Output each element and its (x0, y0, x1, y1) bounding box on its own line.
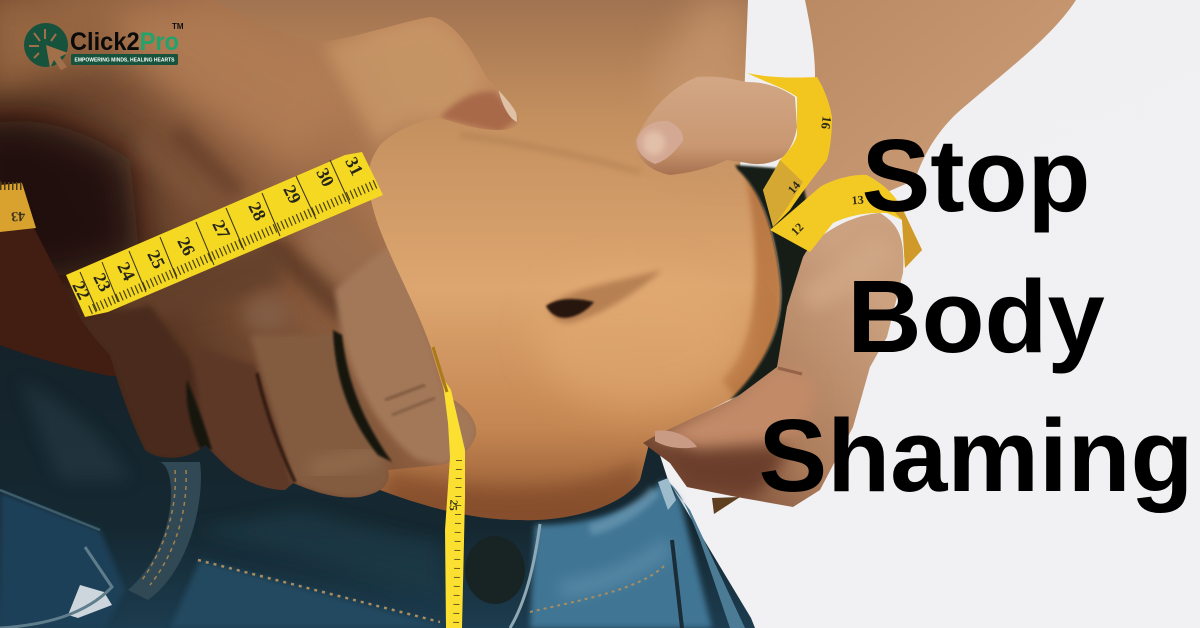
logo trademark: TM (172, 22, 184, 31)
gaps between fingers (333, 330, 392, 462)
index finger (335, 240, 476, 465)
torso and belly (215, 0, 781, 520)
tape: left wrist: 22 (68, 278, 94, 303)
ring finger (193, 358, 280, 490)
pinky finger (116, 304, 198, 404)
tape: left wrist: 23 (89, 270, 115, 295)
tape: left wrist: 30 (312, 165, 338, 190)
left flank (0, 175, 135, 376)
denim fly panel (530, 480, 712, 628)
logo wordmark: Click2Pro (70, 28, 179, 56)
tape: right thumb loop: 16 (818, 115, 835, 131)
thumb nail (498, 90, 518, 122)
tape: left wrist (66, 152, 383, 317)
tape: left wrist: 26 (173, 234, 199, 259)
navel (546, 270, 662, 323)
belly shading (380, 0, 782, 525)
middle finger (250, 335, 389, 498)
thumb nail (637, 121, 683, 164)
pocket denim (0, 492, 125, 628)
headline: Stop Body Shaming: Shaming (759, 398, 1193, 513)
belt loop (128, 462, 201, 600)
tape: left wrist: 31 (341, 154, 367, 179)
right hand: shading (654, 276, 845, 500)
left hand: base (0, 0, 518, 498)
headline: Stop Body Shaming: Stop (862, 118, 1090, 233)
right forearm (800, 0, 1076, 230)
tape: left wrist: 24 (113, 259, 139, 284)
right hand: thumb (635, 77, 797, 175)
tape: right finger loop: 13 (851, 193, 864, 208)
fly seam (510, 524, 540, 628)
waistband seam (0, 490, 100, 530)
tape: right finger loop (770, 175, 922, 268)
thumb (328, 26, 476, 139)
headline: Stop Body Shaming (759, 118, 1193, 513)
right hand: palm and fingers (643, 213, 903, 507)
tape: right finger loop: 12 (788, 220, 806, 238)
tape: left wrist: 29 (279, 182, 305, 207)
headline: Stop Body Shaming: Body (847, 259, 1105, 374)
tape: small left piece: 43 (11, 208, 25, 223)
dark gap beside right hand (730, 165, 815, 400)
tape: hanging: 25 (446, 499, 459, 512)
logo tagline (71, 54, 178, 65)
small tape tab (712, 497, 740, 514)
right hand: fingernail (655, 430, 697, 448)
left hand: light and shadow modelling (0, 0, 518, 498)
tape: left wrist: 27 (208, 217, 234, 242)
logo tagline: EMPOWERING MINDS, HEALING HEARTS (74, 58, 175, 64)
back of hand below tape (310, 230, 346, 280)
button (465, 536, 525, 604)
tape: left wrist: 28 (244, 199, 270, 224)
logo icon (24, 23, 68, 70)
pocket lining (68, 585, 112, 618)
logo: Click2Pro (24, 22, 184, 70)
tape: left wrist: 25 (143, 247, 169, 272)
tape: hanging (431, 343, 465, 628)
tape: right thumb loop: 14 (785, 178, 803, 197)
tape: small left piece (0, 183, 36, 232)
tape: right thumb loop (747, 73, 835, 227)
jeans (0, 340, 755, 628)
